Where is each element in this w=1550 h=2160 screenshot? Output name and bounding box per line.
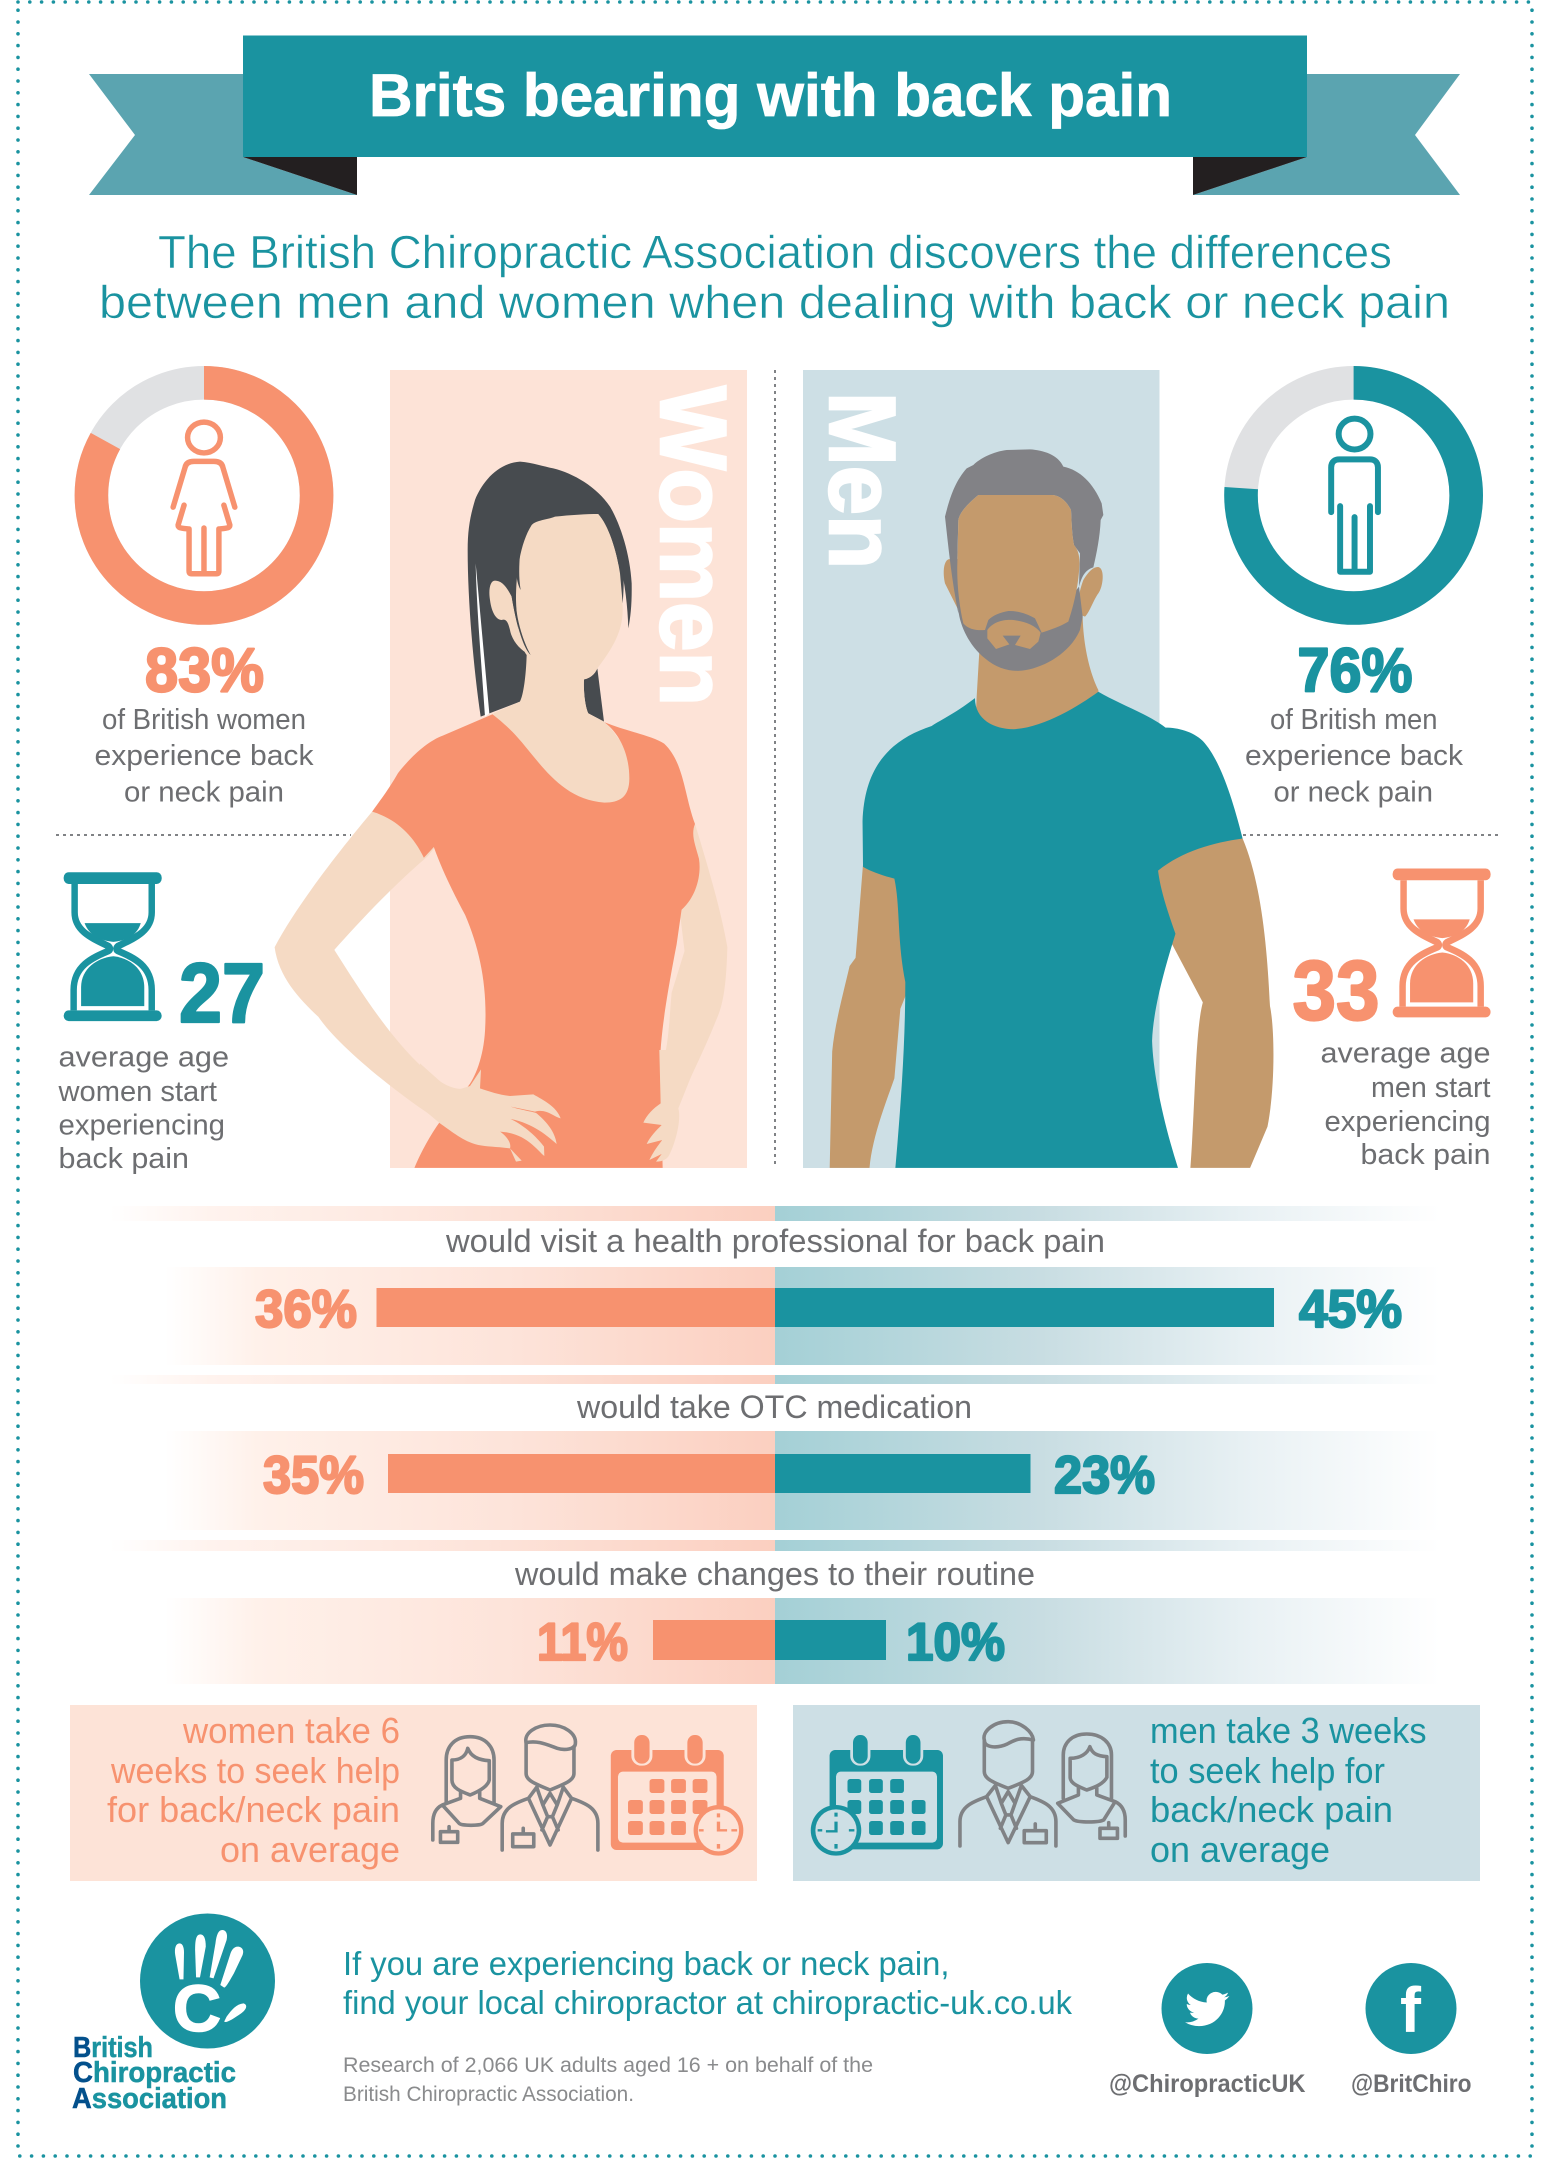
icon: man doctor — [960, 1722, 1056, 1846]
hair behind neck — [584, 668, 604, 722]
men bar 10% — [775, 1620, 886, 1660]
caption: would visit a health professional for back pain — [445, 1223, 1105, 1259]
description: back pain — [58, 1143, 189, 1175]
banner left tail — [89, 74, 357, 195]
icon: woman doctor — [1058, 1734, 1125, 1838]
icons: calendar and doctors — [811, 1722, 1125, 1856]
text block: men take 3 weeks — [1150, 1710, 1426, 1751]
chest — [493, 714, 634, 808]
description: experience back — [1245, 740, 1464, 772]
description: experiencing — [58, 1110, 225, 1142]
t-shirt — [863, 692, 1243, 1168]
subtitle — [99, 226, 1450, 328]
men bar 23% — [775, 1454, 1030, 1493]
title banner — [89, 36, 1460, 195]
icon: hourglass teal — [64, 872, 162, 1021]
description: back pain — [1360, 1139, 1490, 1171]
value 83%: 83% — [145, 636, 264, 706]
ear — [489, 581, 528, 654]
logo: British Chiropractic Association — [72, 1914, 275, 2115]
panel background — [793, 1705, 1480, 1881]
donut chart 76% — [1241, 383, 1466, 608]
row: take OTC medication — [263, 1389, 1155, 1505]
handle: @ChiropracticUK — [1109, 2070, 1306, 2098]
research note: Research of 2,066 UK adults aged 16 + on behalf of the — [343, 2054, 873, 2077]
hair — [468, 462, 632, 717]
woman hands — [420, 1050, 702, 1162]
right separator — [1243, 834, 1500, 836]
text block: for back/neck pain — [107, 1789, 400, 1830]
row: change routine — [514, 1556, 1035, 1672]
banner right tail — [1193, 74, 1460, 195]
women stat: age 27 — [57, 872, 265, 1175]
label 36%: 36% — [255, 1280, 357, 1339]
logo wordmark — [72, 2032, 236, 2115]
centre divider — [774, 370, 776, 1168]
value 27: 27 — [179, 946, 265, 1040]
left separator — [56, 834, 351, 836]
hair strands — [512, 513, 624, 655]
banner left fold — [243, 157, 357, 195]
value 33: 33 — [1292, 944, 1380, 1038]
description: average age — [58, 1042, 229, 1074]
illustration: man — [830, 449, 1273, 1168]
panel: men background — [803, 370, 1160, 1168]
call to action: find your local chiropractor at chiropractic-uk.co.uk — [343, 1984, 1072, 2021]
icons: doctors and calendar — [433, 1725, 743, 1856]
banner right fold — [1193, 157, 1307, 195]
hair highlight — [476, 563, 489, 717]
panel: women background — [390, 370, 747, 1168]
donut chart 83% — [91, 383, 317, 608]
caption: would make changes to their routine — [514, 1556, 1035, 1592]
icon: facebook: f — [1400, 1974, 1422, 2046]
beard — [957, 563, 1083, 671]
woman chest and top — [372, 714, 700, 1168]
icon: woman figure — [173, 422, 235, 574]
hair — [945, 449, 1103, 613]
label 23%: 23% — [1054, 1446, 1155, 1505]
panel: men seek help — [793, 1705, 1480, 1881]
social: twitter — [1109, 1963, 1306, 2098]
logo hand — [175, 1930, 246, 2022]
women bar 36% — [376, 1288, 775, 1327]
description: or neck pain — [124, 776, 284, 808]
label 11%: 11% — [537, 1613, 628, 1672]
label 45%: 45% — [1299, 1280, 1402, 1339]
bar chart: comparison — [110, 1206, 1440, 1684]
text block: back/neck pain — [1150, 1789, 1393, 1830]
man arms — [830, 827, 1273, 1168]
top — [372, 714, 700, 1168]
face and neck — [493, 514, 623, 750]
description: men start — [1371, 1072, 1490, 1104]
description: of British men — [1270, 704, 1438, 736]
left ear — [944, 559, 958, 610]
description — [57, 1042, 229, 1175]
logo wordmark: British — [73, 2032, 153, 2064]
neck — [975, 617, 1100, 733]
woman right arm — [660, 824, 727, 1108]
description — [94, 704, 314, 808]
men stat: age 33 — [1292, 868, 1491, 1171]
description: experience back — [94, 740, 314, 772]
subtitle: The British Chiropractic Association discovers the differences — [158, 226, 1392, 278]
row: visit a health professional — [255, 1223, 1402, 1339]
label 10%: 10% — [906, 1613, 1005, 1672]
description — [1320, 1038, 1490, 1171]
call to action: If you are experiencing back or neck pain, — [343, 1945, 950, 1982]
value 76%: 76% — [1298, 636, 1412, 706]
description: women start — [57, 1076, 217, 1108]
icon: man doctor — [502, 1725, 598, 1850]
description: average age — [1320, 1038, 1490, 1070]
men stat: 76% — [1241, 383, 1466, 808]
subtitle: between men and women when dealing with back or neck pain — [99, 276, 1450, 328]
text block: to seek help for — [1150, 1750, 1385, 1791]
icon: calendar with clock — [811, 1734, 943, 1856]
panel: women seek help — [70, 1705, 757, 1881]
logo wordmark: Association — [72, 2083, 227, 2115]
research note: British Chiropractic Association. — [343, 2083, 634, 2106]
right arm — [1148, 827, 1273, 1168]
text block: weeks to seek help — [110, 1750, 400, 1791]
title: Brits bearing with back pain — [369, 62, 1172, 129]
icon: calendar with clock — [611, 1734, 743, 1856]
call to action — [343, 1945, 1072, 2021]
woman left arm — [275, 789, 478, 1137]
text block: women take 6 — [182, 1710, 400, 1751]
logo circle — [140, 1914, 275, 2048]
face — [957, 495, 1079, 633]
label 35%: 35% — [263, 1446, 364, 1505]
text block — [107, 1710, 400, 1870]
icon: man figure — [1331, 419, 1378, 572]
women bar 35% — [388, 1454, 775, 1493]
mouth area — [987, 620, 1041, 649]
description: experiencing — [1324, 1106, 1490, 1138]
description — [1245, 704, 1464, 808]
right ear — [1078, 567, 1103, 617]
caption: would take OTC medication — [576, 1389, 972, 1425]
left arm — [830, 864, 914, 1168]
description: of British women — [102, 704, 306, 736]
research note — [343, 2054, 873, 2106]
men bar 45% — [775, 1288, 1274, 1327]
icon: woman doctor — [433, 1737, 501, 1842]
text block: on average — [1150, 1829, 1330, 1870]
banner body — [243, 36, 1307, 157]
text block: on average — [220, 1829, 400, 1870]
logo letter: C — [173, 1971, 221, 2045]
text block — [1150, 1710, 1426, 1870]
women stat: 83% — [91, 383, 317, 808]
woman head — [468, 462, 632, 750]
heading: Men: Men — [810, 392, 915, 569]
right hand — [643, 1050, 702, 1162]
illustration: woman — [275, 462, 727, 1168]
panel background — [70, 1705, 757, 1881]
icon: hourglass coral — [1393, 868, 1491, 1017]
icon: twitter — [1162, 1963, 1252, 2054]
description: or neck pain — [1274, 776, 1433, 808]
gradient bands — [110, 1206, 1440, 1684]
women bar 11% — [653, 1620, 775, 1660]
logo wordmark: Chiropractic — [73, 2057, 236, 2089]
social: facebook — [1351, 1963, 1472, 2098]
heading: Women: Women — [641, 386, 746, 706]
handle: @BritChiro — [1351, 2070, 1472, 2098]
left hand — [420, 1063, 561, 1162]
man head — [944, 449, 1103, 733]
